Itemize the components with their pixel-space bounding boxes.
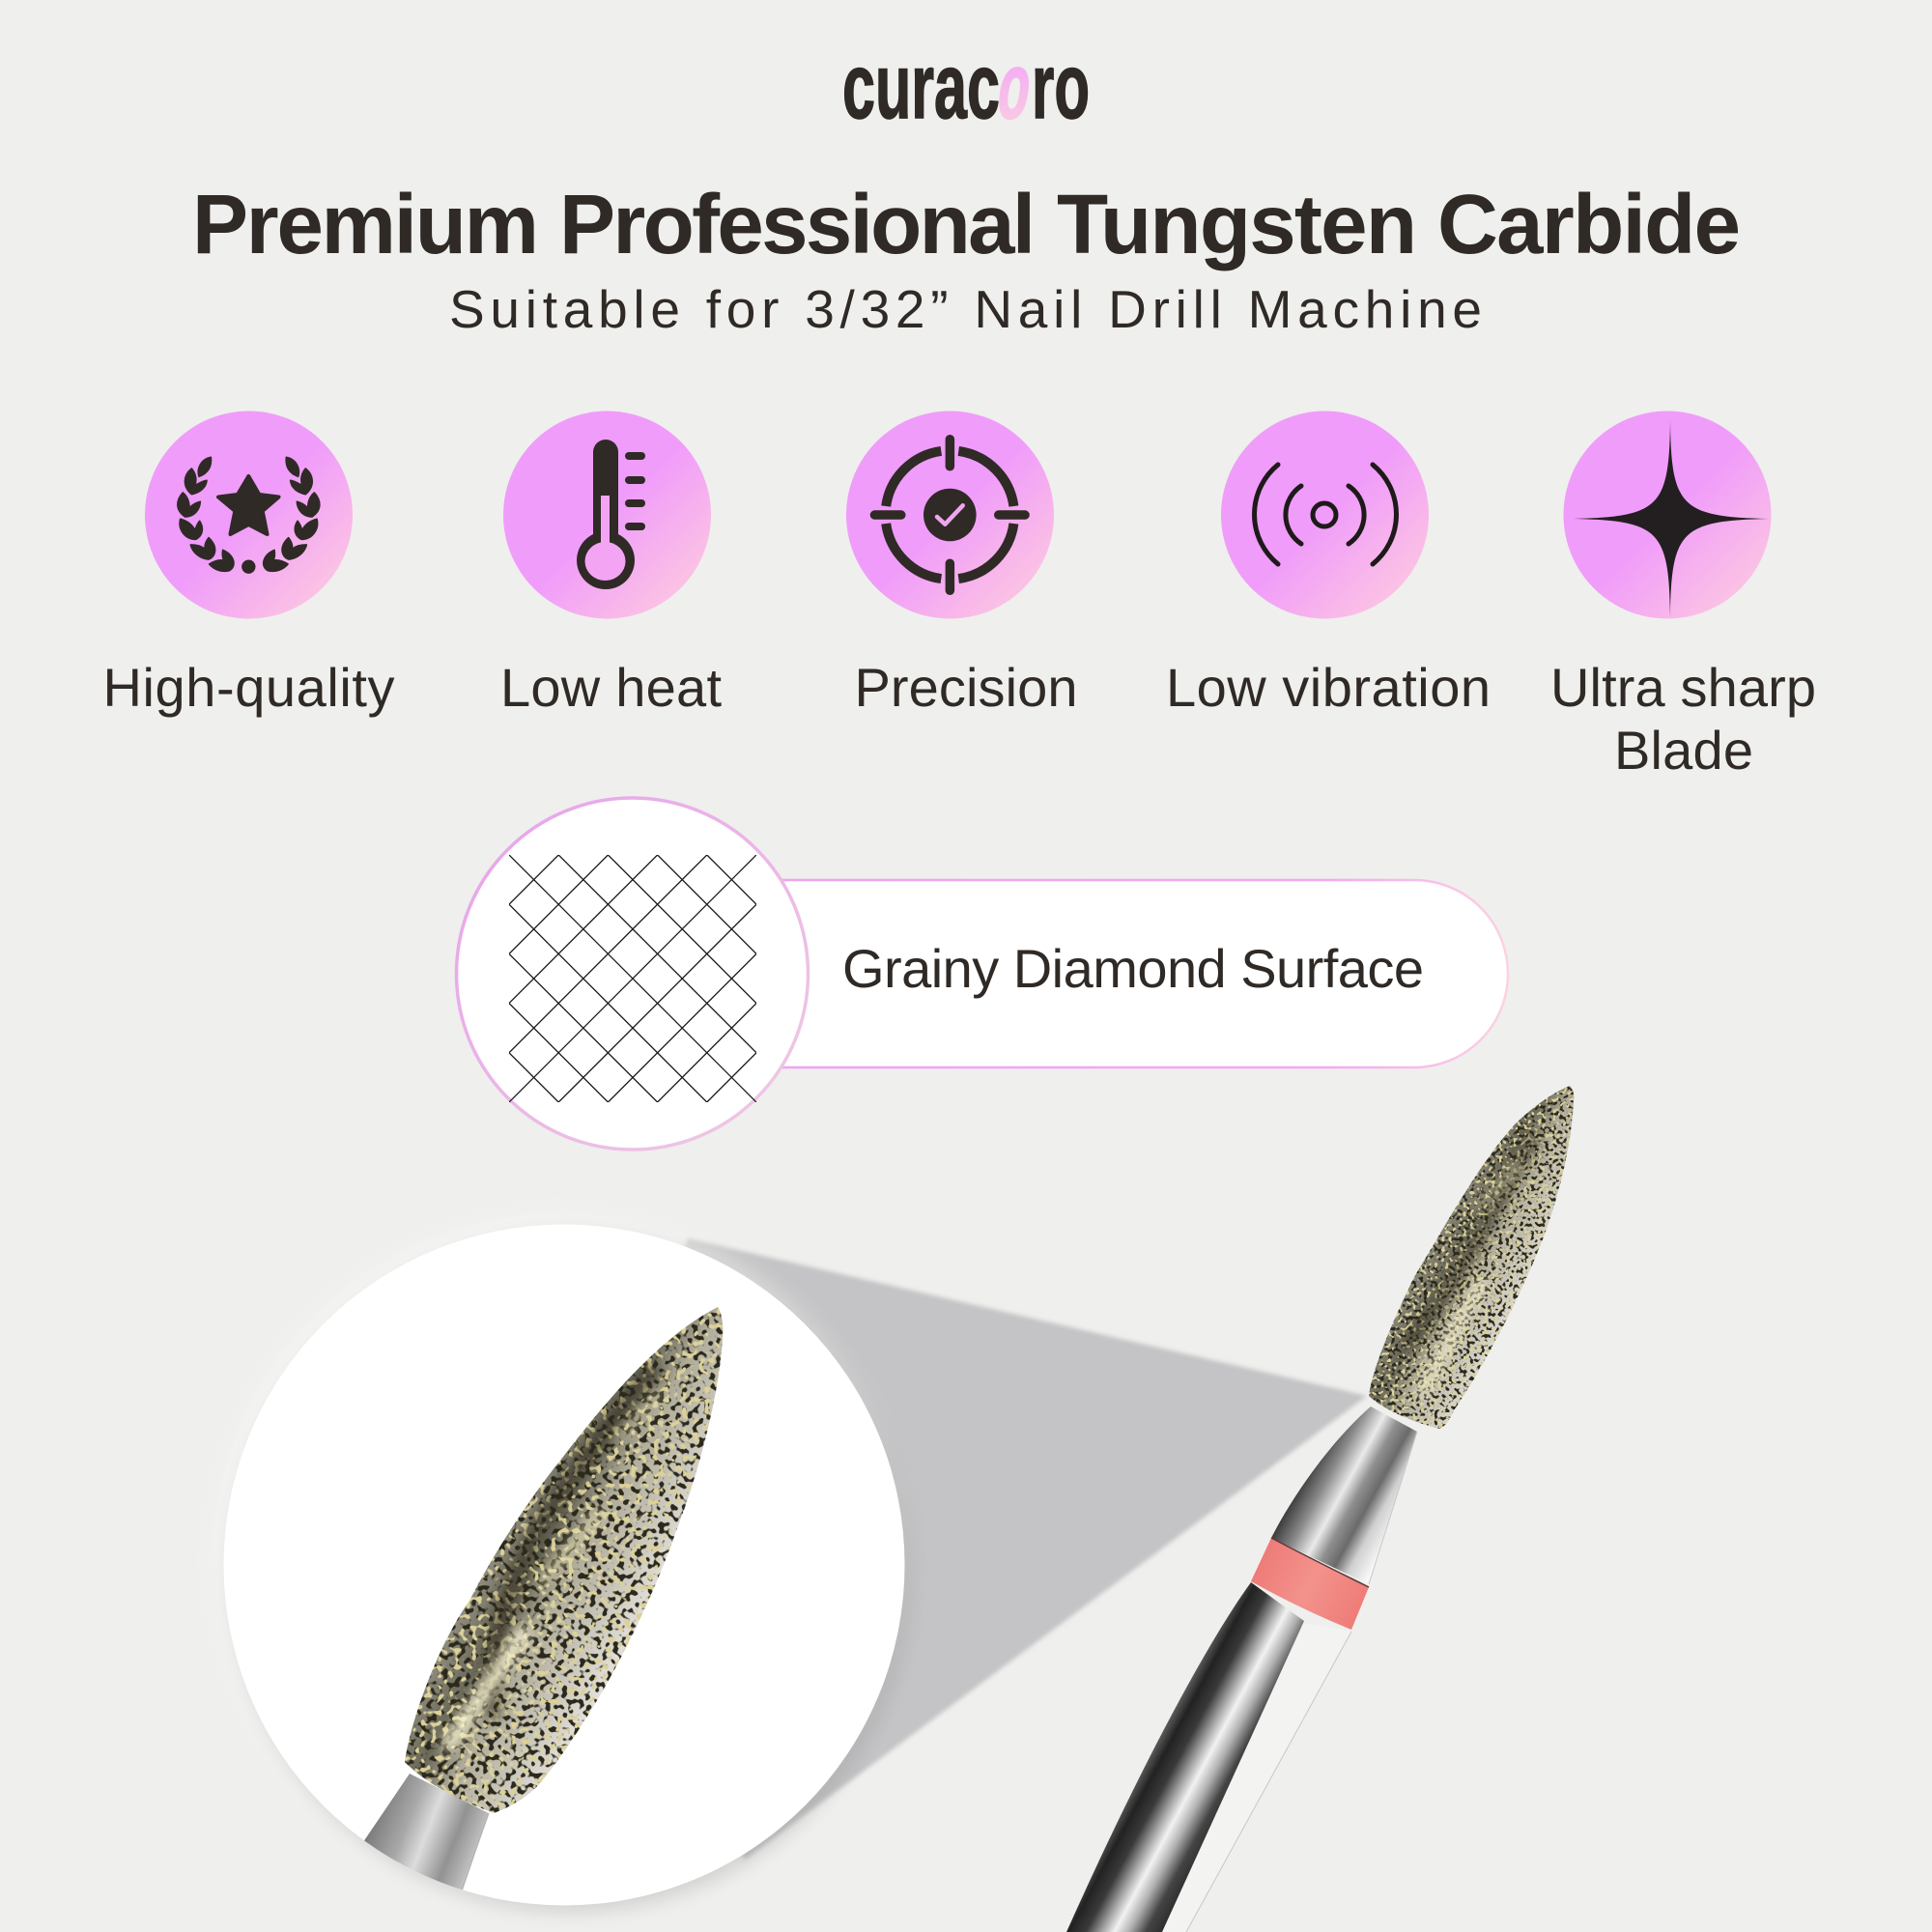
shank outline <box>1186 1432 1417 1932</box>
diamond head <box>1369 1086 1575 1429</box>
label: Ultra sharp Blade: Blade <box>1614 720 1753 781</box>
magnification cone <box>564 1238 1367 1860</box>
band top edge <box>1271 1538 1369 1587</box>
logo: curacoro: o <box>992 35 1037 138</box>
logo: curacoro: ro <box>1032 35 1090 138</box>
feature: ultra sharp blade <box>1550 412 1816 781</box>
subtitle: Suitable for 3/32” Nail Drill Machine <box>449 279 1482 339</box>
label: Ultra sharp Blade: Ultra sharp <box>1550 657 1816 718</box>
upper shank <box>1271 1406 1417 1584</box>
magnified shank <box>364 1774 489 1889</box>
callout: grainy diamond surface <box>456 798 1508 1150</box>
logo: curacoro: curac <box>842 35 1000 138</box>
icon: vibration waves <box>1221 412 1429 618</box>
feature: precision <box>846 412 1078 718</box>
title <box>192 178 1741 271</box>
shank edge highlight <box>1162 1623 1351 1932</box>
label: High-quality: High-quality <box>102 657 394 718</box>
magnified diamond head <box>396 1299 729 1821</box>
circle shadow <box>232 1235 908 1911</box>
circle with diamond grid icon <box>456 798 808 1150</box>
label: Precision: Precision <box>854 657 1078 718</box>
pill <box>618 880 1508 1067</box>
icon: four-point star <box>1563 412 1772 618</box>
feature: low heat <box>500 412 722 718</box>
callout text: Grainy Diamond Surface <box>842 938 1424 999</box>
label: Low heat: Low heat <box>500 657 722 718</box>
label: Ultra sharp Blade <box>1550 657 1816 781</box>
title: Carbide <box>1437 178 1741 271</box>
icon: target with check <box>846 412 1054 618</box>
title: Premium <box>192 178 539 271</box>
circle glow <box>214 1215 902 1903</box>
feature: low vibration <box>1166 412 1491 718</box>
red grit band <box>1251 1538 1369 1630</box>
title: Professional <box>559 178 1036 271</box>
label: Low vibration: Low vibration <box>1166 657 1491 718</box>
white circle <box>224 1225 904 1905</box>
feature: high-quality <box>102 412 394 718</box>
magnified detail circle <box>214 1215 908 1911</box>
icon: laurel wreath with star <box>145 412 353 618</box>
icon: thermometer <box>503 412 711 618</box>
title: Tungsten <box>1057 178 1417 271</box>
lower shank <box>1066 1582 1304 1932</box>
drill bit: full view <box>1066 1072 1584 1932</box>
